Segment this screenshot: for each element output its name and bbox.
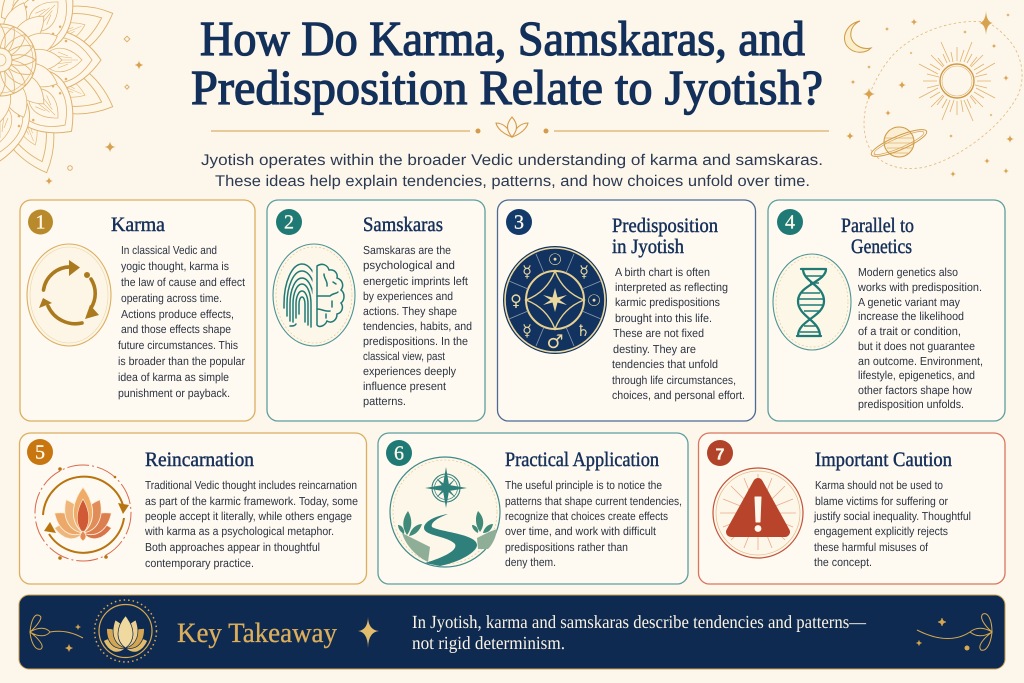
icon: crescent moon xyxy=(845,21,871,52)
icon: sun xyxy=(919,42,995,121)
takeaway text: In Jyotish, karma and samskaras describe tendencies and patterns— xyxy=(412,613,866,633)
body text: In classical Vedic and xyxy=(121,244,217,257)
body text: Traditional Vedic thought includes reincarnation xyxy=(145,479,357,492)
body text: the law of cause and effect xyxy=(121,276,246,289)
panel: samskaras xyxy=(267,200,485,421)
badge 1 xyxy=(28,210,53,234)
body text: predispositions rather than xyxy=(505,541,628,554)
panel: parallel to genetics xyxy=(768,200,1005,421)
heading: Samskaras xyxy=(363,214,443,236)
body text: justify social inequality. Thoughtful xyxy=(813,510,971,523)
body text xyxy=(857,266,983,411)
body text: patterns that shape current tendencies, xyxy=(505,495,682,508)
intro text: These ideas help explain tendencies, patterns, and how choices unfold over time. xyxy=(215,173,810,190)
body text: predispositions. In the xyxy=(363,335,468,348)
body text: classical view, past xyxy=(363,350,446,363)
icon: karma cycle xyxy=(27,244,111,346)
body text: Both approaches appear in thoughtful xyxy=(145,541,320,554)
icon: lotus in rebirth cycle xyxy=(35,465,131,561)
heading: Practical Application xyxy=(505,449,659,471)
body text: Samskaras are the xyxy=(363,244,451,257)
body text: lifestyle, epigenetics, and xyxy=(858,369,975,382)
heading xyxy=(841,215,914,258)
badge 2: 2 xyxy=(284,212,294,234)
icon: birth chart wheel: ☉ xyxy=(587,291,601,310)
panel: important caution xyxy=(698,433,1005,584)
body text xyxy=(612,266,745,402)
body text: Karma should not be used to xyxy=(815,479,943,492)
icon: birth chart wheel: ♀ xyxy=(510,291,522,310)
icon: compass and path xyxy=(390,457,500,567)
icon: warning triangle xyxy=(713,468,803,558)
body text: These are not fixed xyxy=(613,327,704,340)
body text: energetic imprints left xyxy=(363,275,469,288)
icon: fingerprint and brain xyxy=(273,244,355,346)
title xyxy=(191,11,823,115)
body text: works with predisposition. xyxy=(857,281,982,294)
body text: contemporary practice. xyxy=(145,557,254,570)
badge 5: 5 xyxy=(35,442,45,464)
body text: deny them. xyxy=(505,556,556,569)
body text: increase the likelihood xyxy=(858,310,964,323)
title: How Do Karma, Samskaras, and xyxy=(200,11,805,66)
body text: tendencies that unfold xyxy=(612,358,718,371)
body text: and those effects shape xyxy=(121,323,231,336)
body text: influence present xyxy=(363,380,447,393)
title: Predisposition Relate to Jyotish? xyxy=(191,60,823,115)
body text: these harmful misuses of xyxy=(814,541,929,554)
body text: as part of the karmic framework. Today, some xyxy=(145,495,358,508)
body text: karmic predispositions xyxy=(615,296,720,309)
icon: right flourish xyxy=(916,614,992,650)
intro text: Jyotish operates within the broader Vedic understanding of karma and samskaras. xyxy=(201,152,823,169)
icon: dashed orbit xyxy=(864,21,1022,169)
heading xyxy=(612,215,718,258)
body text: actions. They shape xyxy=(363,305,457,318)
panel: predisposition in jyotish xyxy=(498,200,756,421)
body text xyxy=(144,479,358,570)
body text: people accept it literally, while others engage xyxy=(145,510,352,523)
body text: punishment or payback. xyxy=(118,387,230,400)
heading: Parallel to xyxy=(841,215,914,237)
icon: birth chart wheel: ♄ xyxy=(576,321,590,340)
mandala decoration xyxy=(0,0,144,185)
badge 2 xyxy=(276,209,302,235)
icon: left flourish xyxy=(30,615,83,652)
icon: small stars xyxy=(846,11,1014,177)
banner: key takeaway xyxy=(19,595,1005,669)
panel: karma xyxy=(20,200,255,421)
heading: Key Takeaway xyxy=(177,618,337,649)
body text: engagement explicitly rejects xyxy=(814,525,948,538)
body text: destiny. They are xyxy=(613,343,696,356)
heading: Reincarnation xyxy=(145,449,254,471)
badge 7 xyxy=(707,440,733,466)
body text: yogic thought, karma is xyxy=(121,260,229,273)
celestial decoration xyxy=(845,11,1022,177)
icon: sparkle xyxy=(358,617,379,648)
heading: Predisposition xyxy=(612,215,718,237)
body text: an outcome. Environment, xyxy=(858,355,983,368)
body text: with karma as a psychological metaphor. xyxy=(144,525,334,538)
body text xyxy=(505,479,682,569)
icon: birth chart wheel: ♂ xyxy=(546,331,564,353)
body text: The useful principle is to notice the xyxy=(505,479,662,492)
body text: interpreted as reflecting xyxy=(615,281,728,294)
panel: reincarnation xyxy=(20,433,366,584)
takeaway text xyxy=(412,613,866,654)
body text: Actions produce effects, xyxy=(121,308,234,321)
body text: future circumstances. This xyxy=(118,339,238,352)
icon: birth chart wheel: ☿ xyxy=(579,262,589,281)
badge 4: 4 xyxy=(785,212,795,234)
badge 5 xyxy=(27,439,53,465)
body text: through life circumstances, xyxy=(612,374,736,387)
heading: Karma xyxy=(111,214,165,236)
body text: by experiences and xyxy=(363,290,453,303)
body text: A birth chart is often xyxy=(615,266,710,279)
body text: but it does not guarantee xyxy=(858,340,975,353)
icon: birth chart wheel: ☿ xyxy=(522,321,532,340)
body text xyxy=(813,479,971,569)
body text: the concept. xyxy=(814,556,872,569)
icon: ringed planet xyxy=(869,125,929,161)
panel: practical application xyxy=(378,433,688,584)
body text: A genetic variant may xyxy=(858,296,960,309)
icon: birth chart wheel xyxy=(503,246,607,354)
icon: birth chart wheel: ☉ xyxy=(548,250,562,269)
body text: tendencies, habits, and xyxy=(363,320,472,333)
badge 4 xyxy=(777,209,803,235)
body text: psychological and xyxy=(363,259,455,272)
divider with lotus xyxy=(211,117,829,137)
body text xyxy=(363,244,472,408)
badge 3: 3 xyxy=(514,212,524,234)
body text: choices, and personal effort. xyxy=(612,389,745,402)
badge 7: 7 xyxy=(716,446,725,464)
heading: in Jyotish xyxy=(612,236,684,258)
body text: blame victims for suffering or xyxy=(815,495,948,508)
body text: predisposition unfolds. xyxy=(858,398,964,411)
body text: brought into this life. xyxy=(615,312,712,325)
badge 6 xyxy=(386,440,412,466)
badge 1: 1 xyxy=(36,212,46,234)
body text: other factors shape how xyxy=(858,384,973,397)
heading: Genetics xyxy=(851,236,912,258)
body text: of a trait or condition, xyxy=(858,325,961,338)
body text: idea of karma as simple xyxy=(118,371,229,384)
body text xyxy=(118,244,246,400)
icon: golden lotus medallion xyxy=(94,600,156,662)
badge 3 xyxy=(506,209,532,235)
body text: operating across time. xyxy=(121,292,222,305)
body text: Modern genetics also xyxy=(858,266,958,279)
badge 6: 6 xyxy=(394,442,404,464)
heading: Important Caution xyxy=(815,449,952,471)
icon: dna helix xyxy=(773,254,851,350)
body text: over time, and work with difficult xyxy=(505,525,657,538)
intro text xyxy=(201,152,823,190)
body text: experiences deeply xyxy=(363,365,456,378)
body text: patterns. xyxy=(363,395,406,408)
takeaway text: not rigid determinism. xyxy=(412,634,565,654)
body text: is broader than the popular xyxy=(118,355,245,368)
body text: recognize that choices create effects xyxy=(505,510,668,523)
icon: birth chart wheel: ☿ xyxy=(522,262,532,281)
